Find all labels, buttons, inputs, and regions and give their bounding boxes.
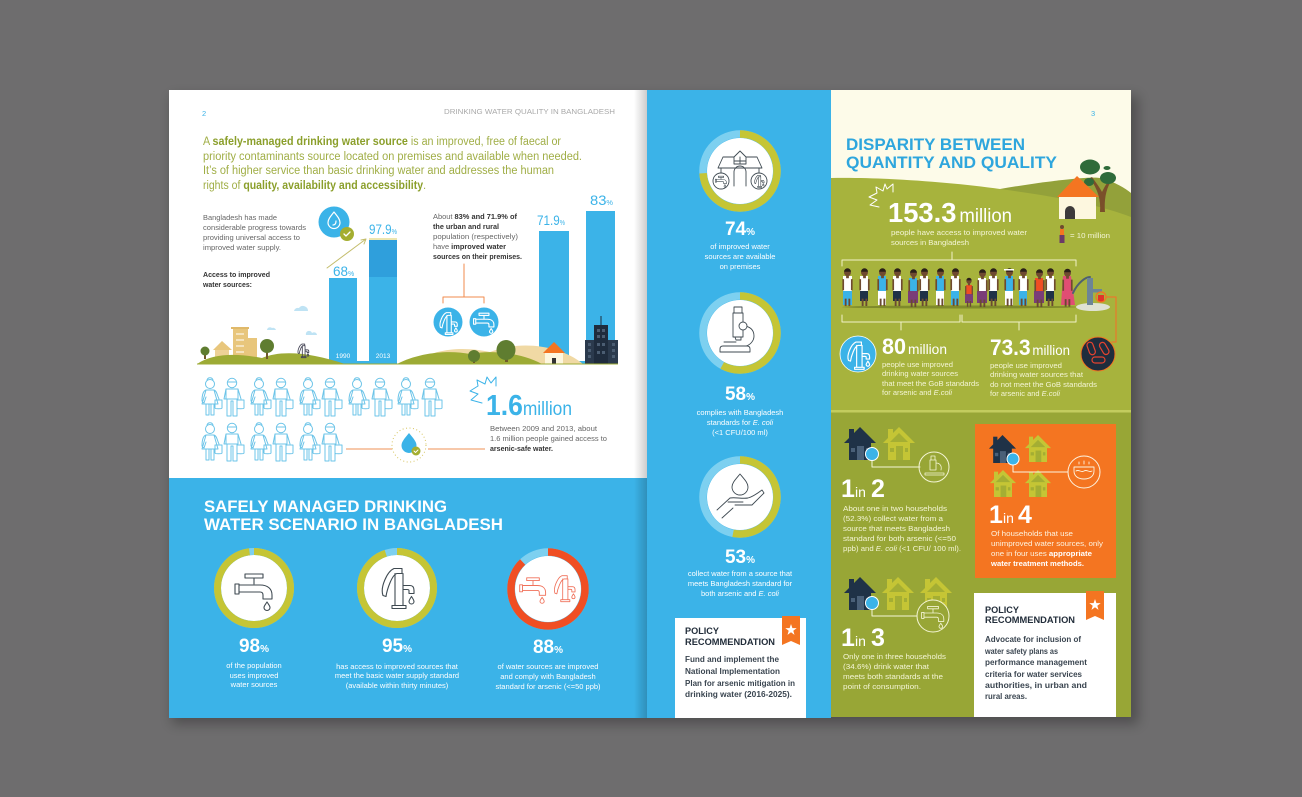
panel: right page top [831, 90, 1131, 412]
premises text: the urban and rural [433, 222, 499, 231]
stat: 73.3 million: 73.3million [990, 335, 1070, 360]
bar chart: access 1990 and 2013: 1990 [336, 353, 351, 360]
compliant text: for arsenic and E.coli [882, 388, 952, 397]
panel: one in four: water treatment methods. [990, 559, 1084, 568]
premises text: About 83% and 71.9% of [433, 212, 517, 221]
callout: policy recommendation: criteria for water services [985, 670, 1083, 679]
stat: 95 percent [335, 636, 459, 690]
panel: safely managed scenario [169, 478, 647, 718]
brackets [842, 252, 1076, 330]
stat: 1 in 2: in [855, 484, 866, 500]
stat: 58 percent [697, 384, 783, 437]
bar chart: rural and urban [537, 192, 615, 364]
heading: WATER SCENARIO IN BANGLADESH [204, 515, 503, 534]
compliant text: drinking water sources [882, 369, 958, 378]
callout: policy recommendation: drinking water (2016-2025). [685, 690, 792, 699]
stat: 1.6 million: 1.6million [486, 390, 572, 422]
panel: one in four: unimproved water sources, only [991, 539, 1103, 548]
panel: one in four [975, 424, 1116, 578]
heading [846, 135, 1058, 172]
one in two text [843, 504, 961, 553]
access text: sources in Bangladesh [891, 238, 969, 247]
stat: 88 percent: 88% [533, 637, 563, 658]
non-compliant text: do not meet the GoB standards [990, 380, 1097, 389]
donut: 88 percent [511, 552, 585, 626]
non-compliant text: drinking water sources that [990, 370, 1084, 379]
stat: 1 in 2: 1 [841, 475, 855, 503]
book shadow [172, 96, 1138, 724]
heading: QUANTITY AND QUALITY [846, 153, 1058, 172]
bracket connector [443, 264, 484, 303]
ribbon with star [1086, 591, 1104, 620]
intro paragraph [203, 136, 582, 192]
one in two text: source that meets Bangladesh [843, 524, 950, 533]
callout: policy recommendation: Advocate for inclusion of [985, 635, 1081, 644]
icon row: people [202, 378, 442, 461]
bar chart: access 1990 and 2013: 97.9% [369, 222, 397, 237]
stat: 58 percent: (<1 CFU/100 ml) [712, 428, 768, 437]
stat: 98 percent [226, 636, 282, 689]
callout: policy recommendation: National Implementation [685, 667, 780, 676]
one in three text [843, 652, 946, 691]
callout: policy recommendation: POLICY [985, 605, 1019, 615]
progress text [202, 213, 306, 289]
progress text: water sources: [202, 280, 252, 289]
compliant text [882, 360, 979, 397]
progress text: Access to improved [203, 270, 270, 279]
icon: pump circle [840, 336, 876, 372]
household group: one in two [844, 427, 949, 482]
arsenic safe text: arsenic-safe water. [490, 444, 553, 453]
icon: water drop badge [318, 206, 354, 241]
access text: people have access to improved water [891, 228, 1028, 237]
bar chart: access 1990 and 2013: 68% [333, 264, 354, 279]
callout: policy recommendation: RECOMMENDATION [985, 615, 1075, 625]
callout: policy recommendation [974, 591, 1116, 717]
donut: 95 percent [360, 552, 434, 624]
arsenic safe text: 1.6 million people gained access to [490, 434, 607, 443]
burst [869, 184, 893, 207]
stat: 53 percent: both arsenic and E. coli [701, 589, 779, 598]
stat: 95 percent: meet the basic water supply standard [335, 671, 459, 680]
progress text: improved water supply. [203, 243, 281, 252]
running header: DRINKING WATER QUALITY IN BANGLADESH [444, 109, 615, 116]
one in three text: Only one in three households [843, 652, 946, 661]
compliant text: that meet the GoB standards [882, 379, 979, 388]
panel: one in four: one in four uses appropriate [991, 549, 1092, 558]
illustration: house [1057, 176, 1099, 219]
callout: policy recommendation: Plan for arsenic mitigation in [685, 679, 795, 688]
non-compliant text: for arsenic and E.coli [990, 389, 1060, 398]
stat: 58 percent: complies with Bangladesh [697, 408, 783, 417]
burst [470, 377, 496, 403]
donut: 53 percent [703, 460, 777, 534]
donut: 98 percent [218, 552, 290, 624]
stat: 1 in 3: in [855, 633, 866, 649]
panel: centre column [647, 90, 831, 718]
arsenic safe text [490, 424, 607, 453]
stat: 80 million: 80million [882, 334, 947, 359]
illustration: village landscape [197, 306, 345, 364]
panel: left page [169, 90, 647, 478]
stat: 88 percent: and comply with Bangladesh [500, 672, 596, 681]
stat: 88 percent [495, 637, 601, 691]
premises text: population (respectively) [433, 232, 519, 241]
icon: pump circle [434, 308, 462, 336]
stat: 95 percent: (available within thirty minutes) [346, 681, 449, 690]
progress text: providing universal access to [203, 233, 300, 242]
progress text: considerable progress towards [203, 223, 306, 232]
bar chart: rural and urban: 83% [590, 192, 613, 208]
stat: 1 in 3: 3 [871, 624, 885, 652]
stat: 153.3 million: 153.3million [888, 197, 1012, 228]
heading: SAFELY MANAGED DRINKING [204, 497, 447, 516]
donut: 58 percent [703, 296, 777, 370]
compliant text: people use improved [882, 360, 953, 369]
panel: right page bottom [831, 410, 1131, 717]
stat: 98 percent: 98% [239, 636, 269, 657]
panel: one in four: 1 [989, 501, 1003, 529]
stat: 74 percent: on premises [720, 262, 761, 271]
access text [891, 228, 1028, 247]
stat: 74 percent: sources are available [705, 252, 775, 261]
arrow: growth [327, 239, 366, 268]
stat: 74 percent: 74% [725, 219, 755, 240]
one in two text: standard for both arsenic (<=50 [843, 534, 956, 543]
page number 3: 3 [1091, 109, 1095, 118]
one in two text: (52.3%) collect water from a [843, 514, 944, 523]
one in two text: About one in two households [843, 504, 947, 513]
stat: 98 percent: uses improved [230, 671, 278, 680]
one in three text: (34.6%) drink water that [843, 662, 930, 671]
bar chart: access 1990 and 2013 [329, 222, 397, 364]
stat: 74 percent: of improved water [710, 242, 770, 251]
callout: policy recommendation: performance management [985, 658, 1087, 667]
illustration: pump and bucket [1073, 277, 1110, 311]
stat: 74 percent [705, 219, 775, 271]
arsenic safe text: Between 2009 and 2013, about [490, 424, 598, 433]
panel: one in four: 4 [1018, 501, 1032, 529]
premises text [433, 212, 522, 261]
stat: 98 percent: of the population [226, 661, 282, 670]
stat: 98 percent: water sources [230, 680, 278, 689]
callout: policy recommendation: RECOMMENDATION [685, 637, 775, 647]
intro paragraph: It’s of higher service than basic drinking water and addresses the human [203, 165, 554, 177]
bar chart: access 1990 and 2013: 2013 [376, 353, 391, 360]
stat: 53 percent: 53% [725, 547, 755, 568]
spine shadow [634, 90, 647, 718]
stat: 95 percent: has access to improved sources that [336, 662, 459, 671]
stat: 53 percent [688, 547, 793, 598]
one in three text: point of consumption. [843, 682, 921, 691]
non-compliant text: people use improved [990, 361, 1062, 370]
intro paragraph: A safely-managed drinking water source is an improved, free of faecal or [203, 136, 561, 148]
intro paragraph: rights of quality, availability and accessibility. [203, 180, 426, 192]
illustration: tree [1080, 160, 1116, 212]
stat: 1 in 2: 2 [871, 475, 885, 503]
callout: policy recommendation [675, 616, 806, 718]
one in two text: ppb) and E. coli (<1 CFU/ 100 ml). [843, 544, 961, 553]
panel: one in four: Of households that use [991, 529, 1073, 538]
premises text: have improved water [433, 242, 506, 251]
icon: bacteria [1081, 337, 1115, 371]
heading: DISPARITY BETWEEN [846, 135, 1025, 154]
stat: 1 in 3: 1 [841, 624, 855, 652]
stat: 58 percent: 58% [725, 384, 755, 405]
stat: 88 percent: of water sources are improved [498, 662, 598, 671]
callout: policy recommendation: water safety plans as [984, 647, 1058, 656]
bar chart: rural and urban: 71.9% [537, 212, 565, 228]
panel: one in four: in [1003, 510, 1014, 526]
progress text: Bangladesh has made [203, 213, 277, 222]
stat: 53 percent: meets Bangladesh standard for [688, 579, 793, 588]
household group: one in three [844, 577, 952, 632]
heading [204, 497, 503, 534]
stat: 53 percent: collect water from a source that [688, 569, 793, 578]
legend: person equals ten million [1060, 225, 1110, 243]
callout: policy recommendation: Fund and implement the [685, 655, 780, 664]
icon: tap circle [470, 308, 498, 336]
premises text: sources on their premises. [433, 252, 522, 261]
legend: person equals ten million: = 10 million [1070, 231, 1110, 240]
stat: 95 percent: 95% [382, 636, 412, 657]
callout: policy recommendation: authorities, in urban and [985, 681, 1087, 690]
page number 2: 2 [202, 109, 206, 118]
stat: 58 percent: standards for E. coli [707, 418, 773, 427]
ribbon with star [782, 616, 800, 645]
illustration: urban landscape [397, 316, 618, 364]
connector [1106, 297, 1116, 342]
callout: policy recommendation: POLICY [685, 626, 719, 636]
hills [831, 178, 1131, 412]
queue of people [842, 268, 1078, 308]
ground line [197, 364, 618, 365]
callout: policy recommendation: rural areas. [985, 692, 1027, 701]
non-compliant text [990, 361, 1097, 398]
stat: 88 percent: standard for arsenic (<=50 ppb) [495, 682, 601, 691]
intro paragraph: priority contaminants source located on premises and available when needed. [203, 151, 582, 163]
one in three text: meets both standards at the [843, 672, 943, 681]
connector with safe water drop [346, 428, 485, 462]
donut: 74 percent [703, 134, 777, 208]
